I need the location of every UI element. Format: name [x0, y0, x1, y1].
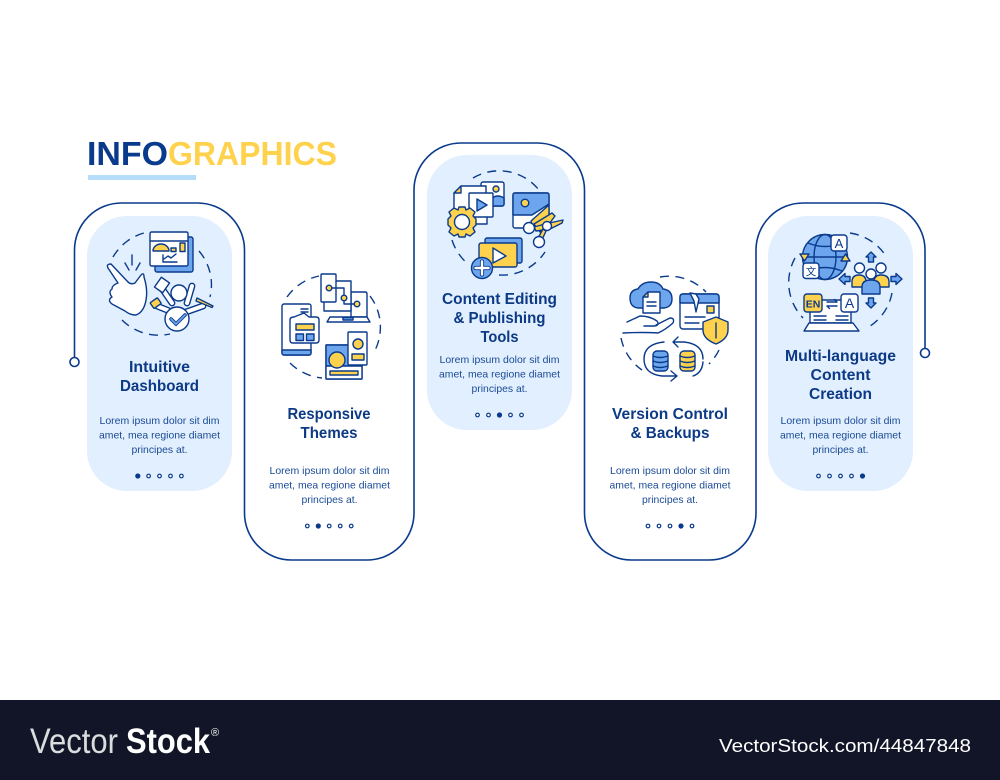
- text block: principes at.: [132, 444, 188, 456]
- text block: principes at.: [302, 494, 358, 506]
- panel: Intuitive Dashboard: [99, 232, 220, 478]
- heading: Tools: [480, 329, 519, 346]
- text block: principes at.: [642, 494, 698, 506]
- heading: & Publishing: [454, 310, 546, 327]
- pagination dots: [646, 524, 694, 528]
- heading: Themes: [300, 425, 358, 442]
- icon: sync arrows: [644, 337, 703, 381]
- heading: Version Control: [612, 406, 728, 423]
- text block: [439, 354, 560, 395]
- connecting timeline outline: [70, 143, 930, 560]
- title: GRAPHICS: [168, 135, 337, 172]
- heading: [442, 291, 557, 346]
- footer image id: VectorStock.com/44847848: [719, 735, 971, 756]
- text block: principes at.: [812, 444, 868, 456]
- heading: & Backups: [630, 425, 710, 442]
- panel: shaded backgrounds for steps 1, 3 and 5: [87, 155, 913, 491]
- icon: globe, people and translation laptop: EN: [806, 298, 820, 310]
- icon: dashboard, hand and multitasking person: [107, 232, 213, 335]
- heading: Content Editing: [442, 291, 557, 308]
- text block: Lorem ipsum dolor sit dim: [440, 354, 560, 366]
- panel: Content Editing & Publishing Tools: [439, 171, 563, 417]
- footer bar: [0, 700, 1000, 780]
- pagination dots: [306, 524, 353, 528]
- icon: pointing hand: [107, 264, 147, 315]
- title: INFO: [87, 135, 168, 172]
- heading: Responsive: [288, 406, 371, 423]
- panel: Multi-language Content Creation: [780, 233, 902, 478]
- heading: [785, 348, 896, 403]
- pagination dots: [476, 413, 523, 417]
- text block: Lorem ipsum dolor sit dim: [270, 465, 390, 477]
- icon: arms of the person: [157, 286, 203, 312]
- heading: [120, 359, 199, 395]
- icon: scissors: [534, 213, 555, 232]
- icon: globe, people and translation laptop: [789, 233, 902, 331]
- title: [87, 135, 337, 180]
- heading: [612, 406, 728, 442]
- footer logo: Stock: [126, 722, 210, 761]
- text block: Lorem ipsum dolor sit dim: [100, 415, 220, 427]
- icon: globe, people and translation laptop: 文: [806, 265, 817, 278]
- pagination dots: [817, 474, 864, 478]
- text block: amet, mea regione diamet: [780, 430, 901, 442]
- icon: responsive devices: [282, 274, 380, 379]
- icon: globe, people and translation laptop: A: [835, 236, 844, 251]
- footer logo: ®: [211, 727, 219, 739]
- text block: [269, 465, 390, 506]
- heading: Dashboard: [120, 378, 199, 395]
- heading: Creation: [809, 386, 872, 403]
- text block: Lorem ipsum dolor sit dim: [780, 415, 901, 427]
- text block: [99, 415, 220, 456]
- heading: Multi-language: [785, 348, 896, 365]
- footer logo: Vector: [30, 722, 118, 761]
- text block: amet, mea regione diamet: [269, 480, 390, 492]
- icon: globe, people and translation laptop: A: [845, 295, 855, 311]
- pagination dots: [136, 474, 183, 478]
- text block: Lorem ipsum dolor sit dim: [610, 465, 730, 477]
- text block: [610, 465, 731, 506]
- icon: cloud, browser, shield and database sync: [621, 276, 728, 381]
- panel: Responsive Themes: [269, 274, 390, 528]
- text block: principes at.: [472, 383, 528, 395]
- text block: amet, mea regione diamet: [99, 430, 220, 442]
- icon: open hand: [623, 316, 674, 333]
- icon: media editing tools: [448, 171, 563, 278]
- text block: amet, mea regione diamet: [439, 368, 560, 380]
- heading: Content: [810, 367, 871, 384]
- heading: [288, 406, 371, 442]
- panel: Version Control & Backups: [610, 276, 731, 528]
- footer logo: [30, 722, 219, 761]
- text block: [780, 415, 901, 456]
- text block: amet, mea regione diamet: [610, 480, 731, 492]
- heading: Intuitive: [129, 359, 190, 376]
